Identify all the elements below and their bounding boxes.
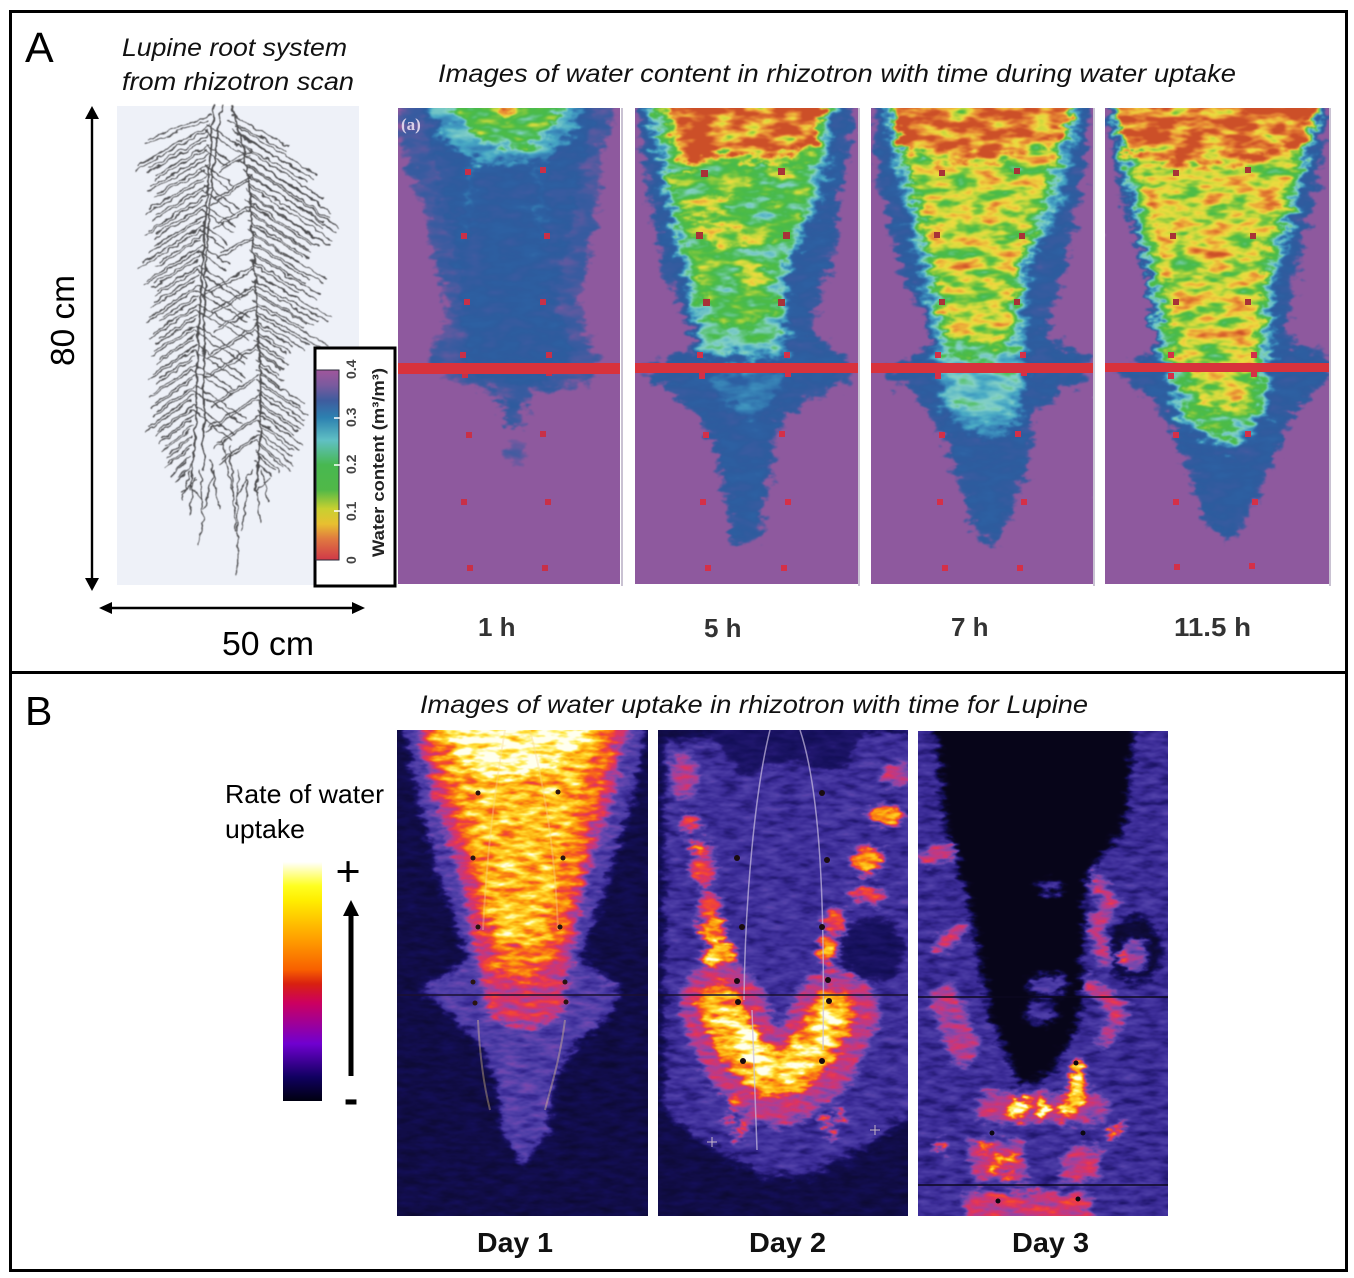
time labels: 7 h: [951, 612, 989, 642]
arrow: increasing uptake: [343, 900, 359, 1076]
measurement dots: [990, 1060, 1086, 1204]
heat map: water content at 7 h: [871, 108, 1093, 584]
caption: lupine root system: from rhizotron scan: [122, 68, 354, 96]
red reference line: [1105, 363, 1330, 372]
day labels: [477, 1227, 1089, 1258]
colour scale: water content: Water content (m³/m³): [369, 368, 388, 557]
red reference line: [398, 363, 620, 374]
root traces: [478, 730, 565, 1110]
colour scale: water content: 0.4: [343, 359, 359, 379]
colour scale: rate of uptake: [283, 862, 322, 1101]
heat map: day 2: [658, 730, 908, 1216]
dimension arrow: 50 cm: [99, 602, 365, 662]
day labels: Day 1: [477, 1227, 553, 1258]
measurement dots: [696, 168, 790, 306]
time labels: 11.5 h: [1174, 612, 1251, 642]
small crosses: [707, 1125, 880, 1147]
heat map: water content at 1 h: [398, 108, 620, 584]
root traces: [744, 730, 823, 1150]
heat map: day 1: [397, 730, 648, 1216]
minus sign: -: [344, 1075, 358, 1123]
time labels: 5 h: [704, 613, 742, 643]
legend title: rate of water uptake: Rate of water: [225, 779, 384, 809]
colour scale: water content: 0: [343, 556, 359, 564]
panel letter A: A: [25, 24, 54, 72]
root system scan: [117, 106, 359, 585]
heat map: day 3: [918, 731, 1168, 1216]
plot label (a): (a): [401, 115, 421, 134]
dimension arrow: 50 cm: 50 cm: [222, 625, 314, 662]
caption: water uptake images: Images of water uptake in rhizotron with time for Lupine: [420, 691, 1088, 719]
measurement dots: [470, 790, 568, 1006]
colour scale: water content: 0.2: [343, 454, 359, 474]
measurement dots: [934, 168, 1025, 305]
heat map: water content at 5 h: [635, 108, 858, 584]
caption: water content images: Images of water content in rhizotron with time during water uptake: [438, 60, 1236, 88]
time labels: [478, 612, 1251, 643]
red reference line: [871, 363, 1093, 373]
panel letter B: B: [25, 688, 52, 734]
legend title: rate of water uptake: uptake: [225, 814, 305, 844]
panel B: water uptake images: [25, 688, 1178, 1258]
crack line: [658, 994, 908, 996]
colour scale: water content: 0.1: [343, 501, 359, 521]
heat map: water content at 11.5 h: [1105, 108, 1329, 584]
measurement dots: [734, 790, 832, 1064]
colour scale: water content: [315, 348, 395, 586]
plus sign: +: [335, 848, 361, 896]
time labels: 1 h: [478, 612, 516, 642]
day labels: Day 2: [749, 1227, 826, 1258]
caption: lupine root system: Lupine root system: [122, 34, 347, 62]
measurement dots: [460, 167, 552, 571]
panel edge lines: [622, 108, 1330, 586]
dimension arrow: 80 cm: 80 cm: [44, 275, 81, 366]
panel A: root system and water content images: [25, 24, 1340, 662]
day labels: Day 3: [1012, 1227, 1089, 1258]
dimension arrow: 80 cm: [44, 106, 99, 591]
crack line: [397, 994, 648, 996]
measurement dots: [1170, 167, 1256, 305]
red reference line: [635, 363, 858, 373]
crack lines: [918, 997, 1168, 1185]
colour scale: water content: 0.3: [343, 407, 359, 427]
